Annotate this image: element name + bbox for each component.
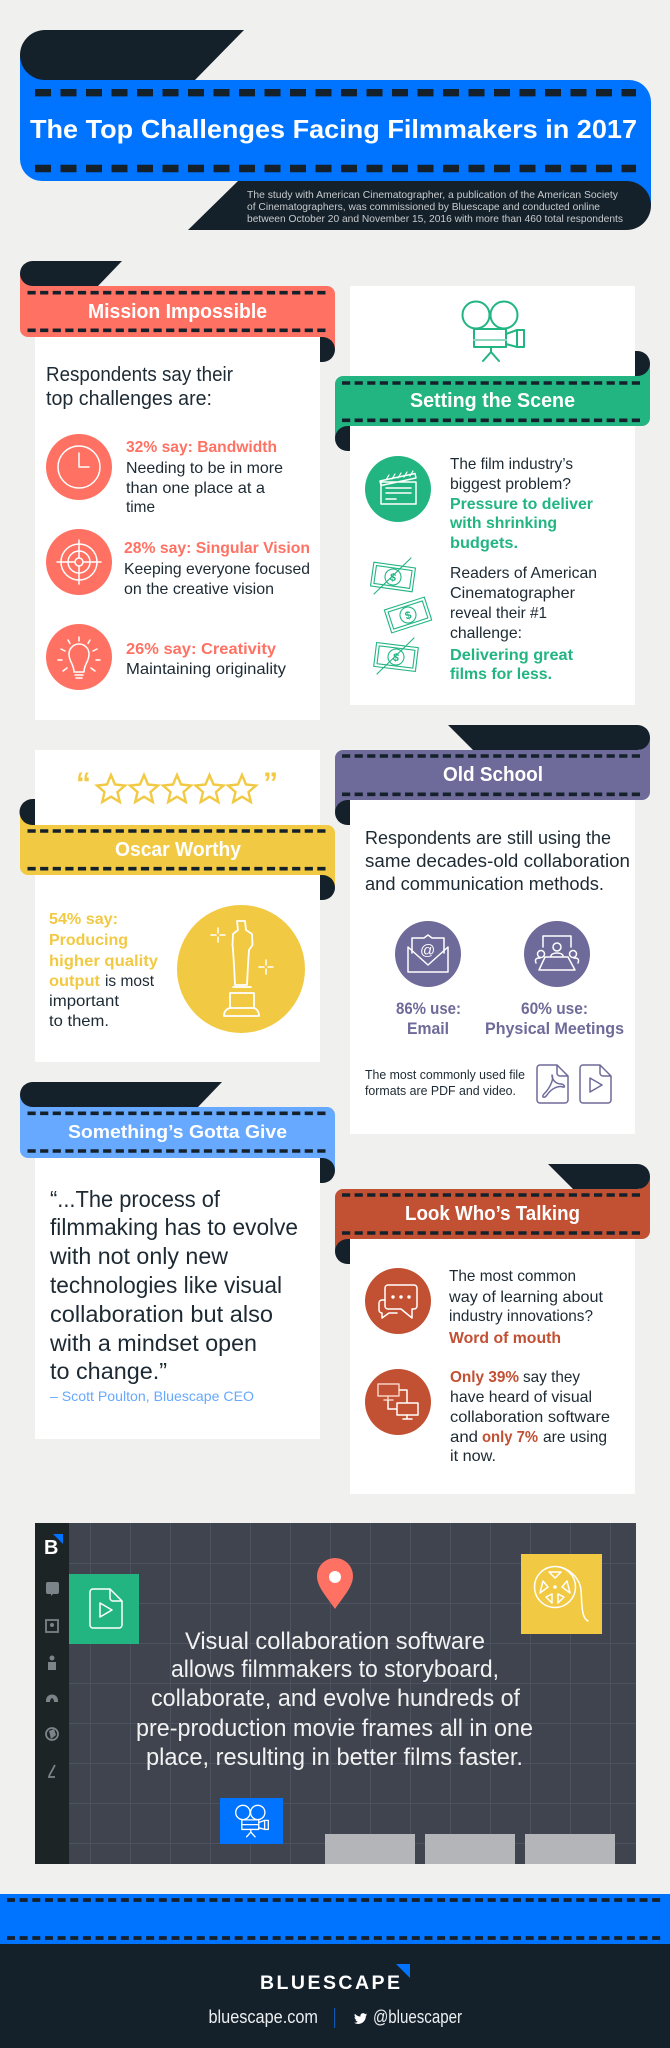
icon: location pin xyxy=(317,1558,353,1609)
sidebar icons xyxy=(46,1582,59,1777)
text: higher quality output: output xyxy=(49,973,101,990)
heading: Oscar Worthy xyxy=(115,839,242,861)
text: higher quality output: to them. xyxy=(49,1013,109,1030)
text: singular vision: on the creative vision xyxy=(124,581,274,598)
header banner xyxy=(20,30,651,230)
icon: pdf file xyxy=(537,1065,568,1103)
panel: Setting the Scene xyxy=(335,286,650,705)
heading: Something’s Gotta Give xyxy=(68,1121,287,1142)
text: bandwidth: time xyxy=(126,499,155,516)
text: biggest problem: biggest problem? xyxy=(450,476,571,493)
text: biggest problem: with shrinking xyxy=(449,515,557,532)
title: The Top Challenges Facing Filmmakers in 2017 xyxy=(30,114,637,144)
description text: Visual collaboration software xyxy=(185,1628,485,1655)
icon: clock xyxy=(46,434,112,500)
text: heard of visual collaboration: it now. xyxy=(450,1448,496,1465)
icon: film reel tile xyxy=(521,1554,602,1634)
intro text: Respondents say their xyxy=(46,364,233,386)
quote xyxy=(49,1186,298,1384)
icon: dollar bills xyxy=(371,558,432,674)
text: creativity xyxy=(126,641,286,678)
text: higher quality output: higher quality xyxy=(49,953,158,970)
text: readers challenge: Cinematographer xyxy=(450,585,576,602)
text: heard of visual collaboration: only 7% xyxy=(482,1429,538,1446)
intro text: Respondents are still using the xyxy=(365,828,611,848)
footer xyxy=(0,1944,670,2048)
icon: dollar bills: $ xyxy=(389,572,397,584)
twitter handle: @bluescaper xyxy=(373,2007,462,2027)
text: readers challenge: challenge: xyxy=(450,625,522,642)
text: bandwidth: Needing to be in more xyxy=(126,460,283,477)
text: singular vision: Keeping everyone focused xyxy=(124,561,310,578)
panel: software board xyxy=(35,1523,636,1864)
text: readers challenge: Delivering great xyxy=(450,647,574,664)
icon: dollar bills: $ xyxy=(392,652,400,664)
sidebar xyxy=(35,1523,69,1864)
intro text: top challenges are: xyxy=(46,388,212,410)
intro text xyxy=(46,364,233,410)
text: higher quality output: Producing xyxy=(49,932,128,949)
intro text: and communication methods. xyxy=(365,874,604,894)
text: bandwidth xyxy=(126,439,283,516)
text: word of mouth: The most common xyxy=(449,1268,576,1285)
text: bandwidth: than one place at a xyxy=(126,480,265,497)
text: file formats: formats are PDF and video. xyxy=(365,1084,516,1098)
description text xyxy=(136,1628,533,1771)
text: heard of visual collaboration: say they xyxy=(523,1369,580,1386)
icon: five stars with quotes: “ xyxy=(76,767,91,800)
text: creativity: 26% say: Creativity xyxy=(126,641,276,658)
text: higher quality output: important xyxy=(49,993,120,1010)
panel: Mission Impossible xyxy=(20,261,335,720)
text: bandwidth: 32% say: Bandwidth xyxy=(126,439,277,456)
icon: dollar bills: $ xyxy=(404,609,413,623)
icon: oscar statue xyxy=(177,905,305,1033)
text: biggest problem xyxy=(449,456,593,552)
quote: technologies like visual xyxy=(50,1272,282,1298)
icon: meeting room xyxy=(524,921,590,987)
text: biggest problem: budgets. xyxy=(450,535,518,552)
icon: connected screens xyxy=(365,1369,431,1435)
panel: Something's Gotta Give xyxy=(20,1082,335,1439)
text: file formats: The most commonly used file xyxy=(365,1068,525,1082)
sidebar logo xyxy=(44,1534,63,1559)
study description: The study with American Cinematographer, a publication of the American Society xyxy=(247,189,619,201)
quote: with not only new xyxy=(49,1243,228,1269)
text: higher quality output xyxy=(49,911,158,1030)
footer film strip xyxy=(0,1894,670,1944)
text: heard of visual collaboration: Only 39% xyxy=(450,1369,519,1386)
icon: camera tile xyxy=(220,1798,283,1844)
label: physical meetings: Physical Meetings xyxy=(485,1020,624,1038)
icon: email envelope xyxy=(395,921,461,987)
icon: movie camera xyxy=(462,302,524,361)
text: readers challenge: films for less. xyxy=(450,666,552,683)
text: word of mouth: way of learning about xyxy=(448,1289,604,1306)
label: physical meetings xyxy=(485,1000,624,1038)
icon: email envelope: @ xyxy=(420,942,435,959)
panel: Oscar Worthy xyxy=(20,750,335,1062)
text: word of mouth: industry innovations? xyxy=(449,1308,593,1325)
intro text xyxy=(365,828,630,894)
label: email xyxy=(396,1000,461,1038)
quote: with a mindset open xyxy=(49,1330,257,1356)
text: singular vision xyxy=(124,540,310,598)
quote: collaboration but also xyxy=(50,1301,273,1327)
heading: Mission Impossible xyxy=(88,301,267,323)
logo: bluescape: BLUESCAPE xyxy=(260,1972,400,1994)
description text: place, resulting in better films faster. xyxy=(146,1744,523,1771)
icon: twitter bird xyxy=(354,2013,367,2024)
quote: filmmaking has to evolve xyxy=(50,1214,298,1240)
text: word of mouth xyxy=(448,1268,604,1347)
text: heard of visual collaboration: have heard of visual xyxy=(450,1389,592,1406)
icon: five stars with quotes: ” xyxy=(263,767,278,800)
icon: light bulb xyxy=(46,624,112,690)
text: creativity: Maintaining originality xyxy=(126,661,286,678)
sidebar logo: B xyxy=(44,1537,58,1559)
text: heard of visual collaboration: are using xyxy=(543,1429,607,1446)
icon: chat bubbles xyxy=(365,1268,431,1334)
panel: Look Who's Talking xyxy=(335,1164,650,1494)
text: file formats xyxy=(365,1068,525,1098)
study description xyxy=(247,189,623,225)
text: word of mouth: Word of mouth xyxy=(449,1330,561,1347)
text: readers challenge: reveal their #1 xyxy=(450,605,547,622)
label: email: Email xyxy=(407,1020,449,1038)
heading: Setting the Scene xyxy=(410,390,575,412)
text: singular vision: 28% say: Singular Vision xyxy=(124,540,310,557)
panel: Old School xyxy=(335,725,650,1134)
website: bluescape.com xyxy=(208,2007,318,2027)
text: heard of visual collaboration: and xyxy=(450,1429,478,1446)
icon: five stars with quotes xyxy=(76,767,278,802)
text: biggest problem: Pressure to deliver xyxy=(450,496,593,513)
quote: to change.” xyxy=(50,1358,167,1384)
quote attribution: – Scott Poulton, Bluescape CEO xyxy=(50,1388,254,1404)
text: readers challenge: Readers of American xyxy=(450,565,597,582)
text: heard of visual collaboration xyxy=(450,1369,610,1465)
study description: between October 20 and November 15, 2016 with more than 460 total respondents xyxy=(247,213,623,225)
text: higher quality output: is most xyxy=(105,973,155,990)
label: email: 86% use: xyxy=(396,1000,461,1018)
text: biggest problem: The film industry’s xyxy=(450,456,573,473)
grey placeholder tiles xyxy=(325,1834,615,1864)
text: readers challenge xyxy=(450,565,597,683)
description text: allows filmmakers to storyboard, xyxy=(171,1656,499,1683)
intro text: same decades-old collaboration xyxy=(365,851,630,871)
icon: video tile xyxy=(69,1574,139,1644)
logo: bluescape xyxy=(260,1964,410,1994)
icon: target xyxy=(46,529,112,595)
description text: collaborate, and evolve hundreds of xyxy=(151,1685,520,1712)
icon: clapperboard xyxy=(365,456,431,522)
heading: Look Who’s Talking xyxy=(405,1203,580,1225)
heading: Old School xyxy=(443,764,543,786)
study description: of Cinematographers, was commissioned by Bluescape and conducted online xyxy=(247,201,600,213)
label: physical meetings: 60% use: xyxy=(521,1000,588,1018)
text: heard of visual collaboration: collaboration software xyxy=(450,1409,610,1426)
text: higher quality output: 54% say: xyxy=(49,911,118,928)
quote: “...The process of xyxy=(50,1186,221,1212)
icon: video file xyxy=(580,1065,611,1103)
description text: pre-production movie frames all in one xyxy=(136,1715,533,1742)
